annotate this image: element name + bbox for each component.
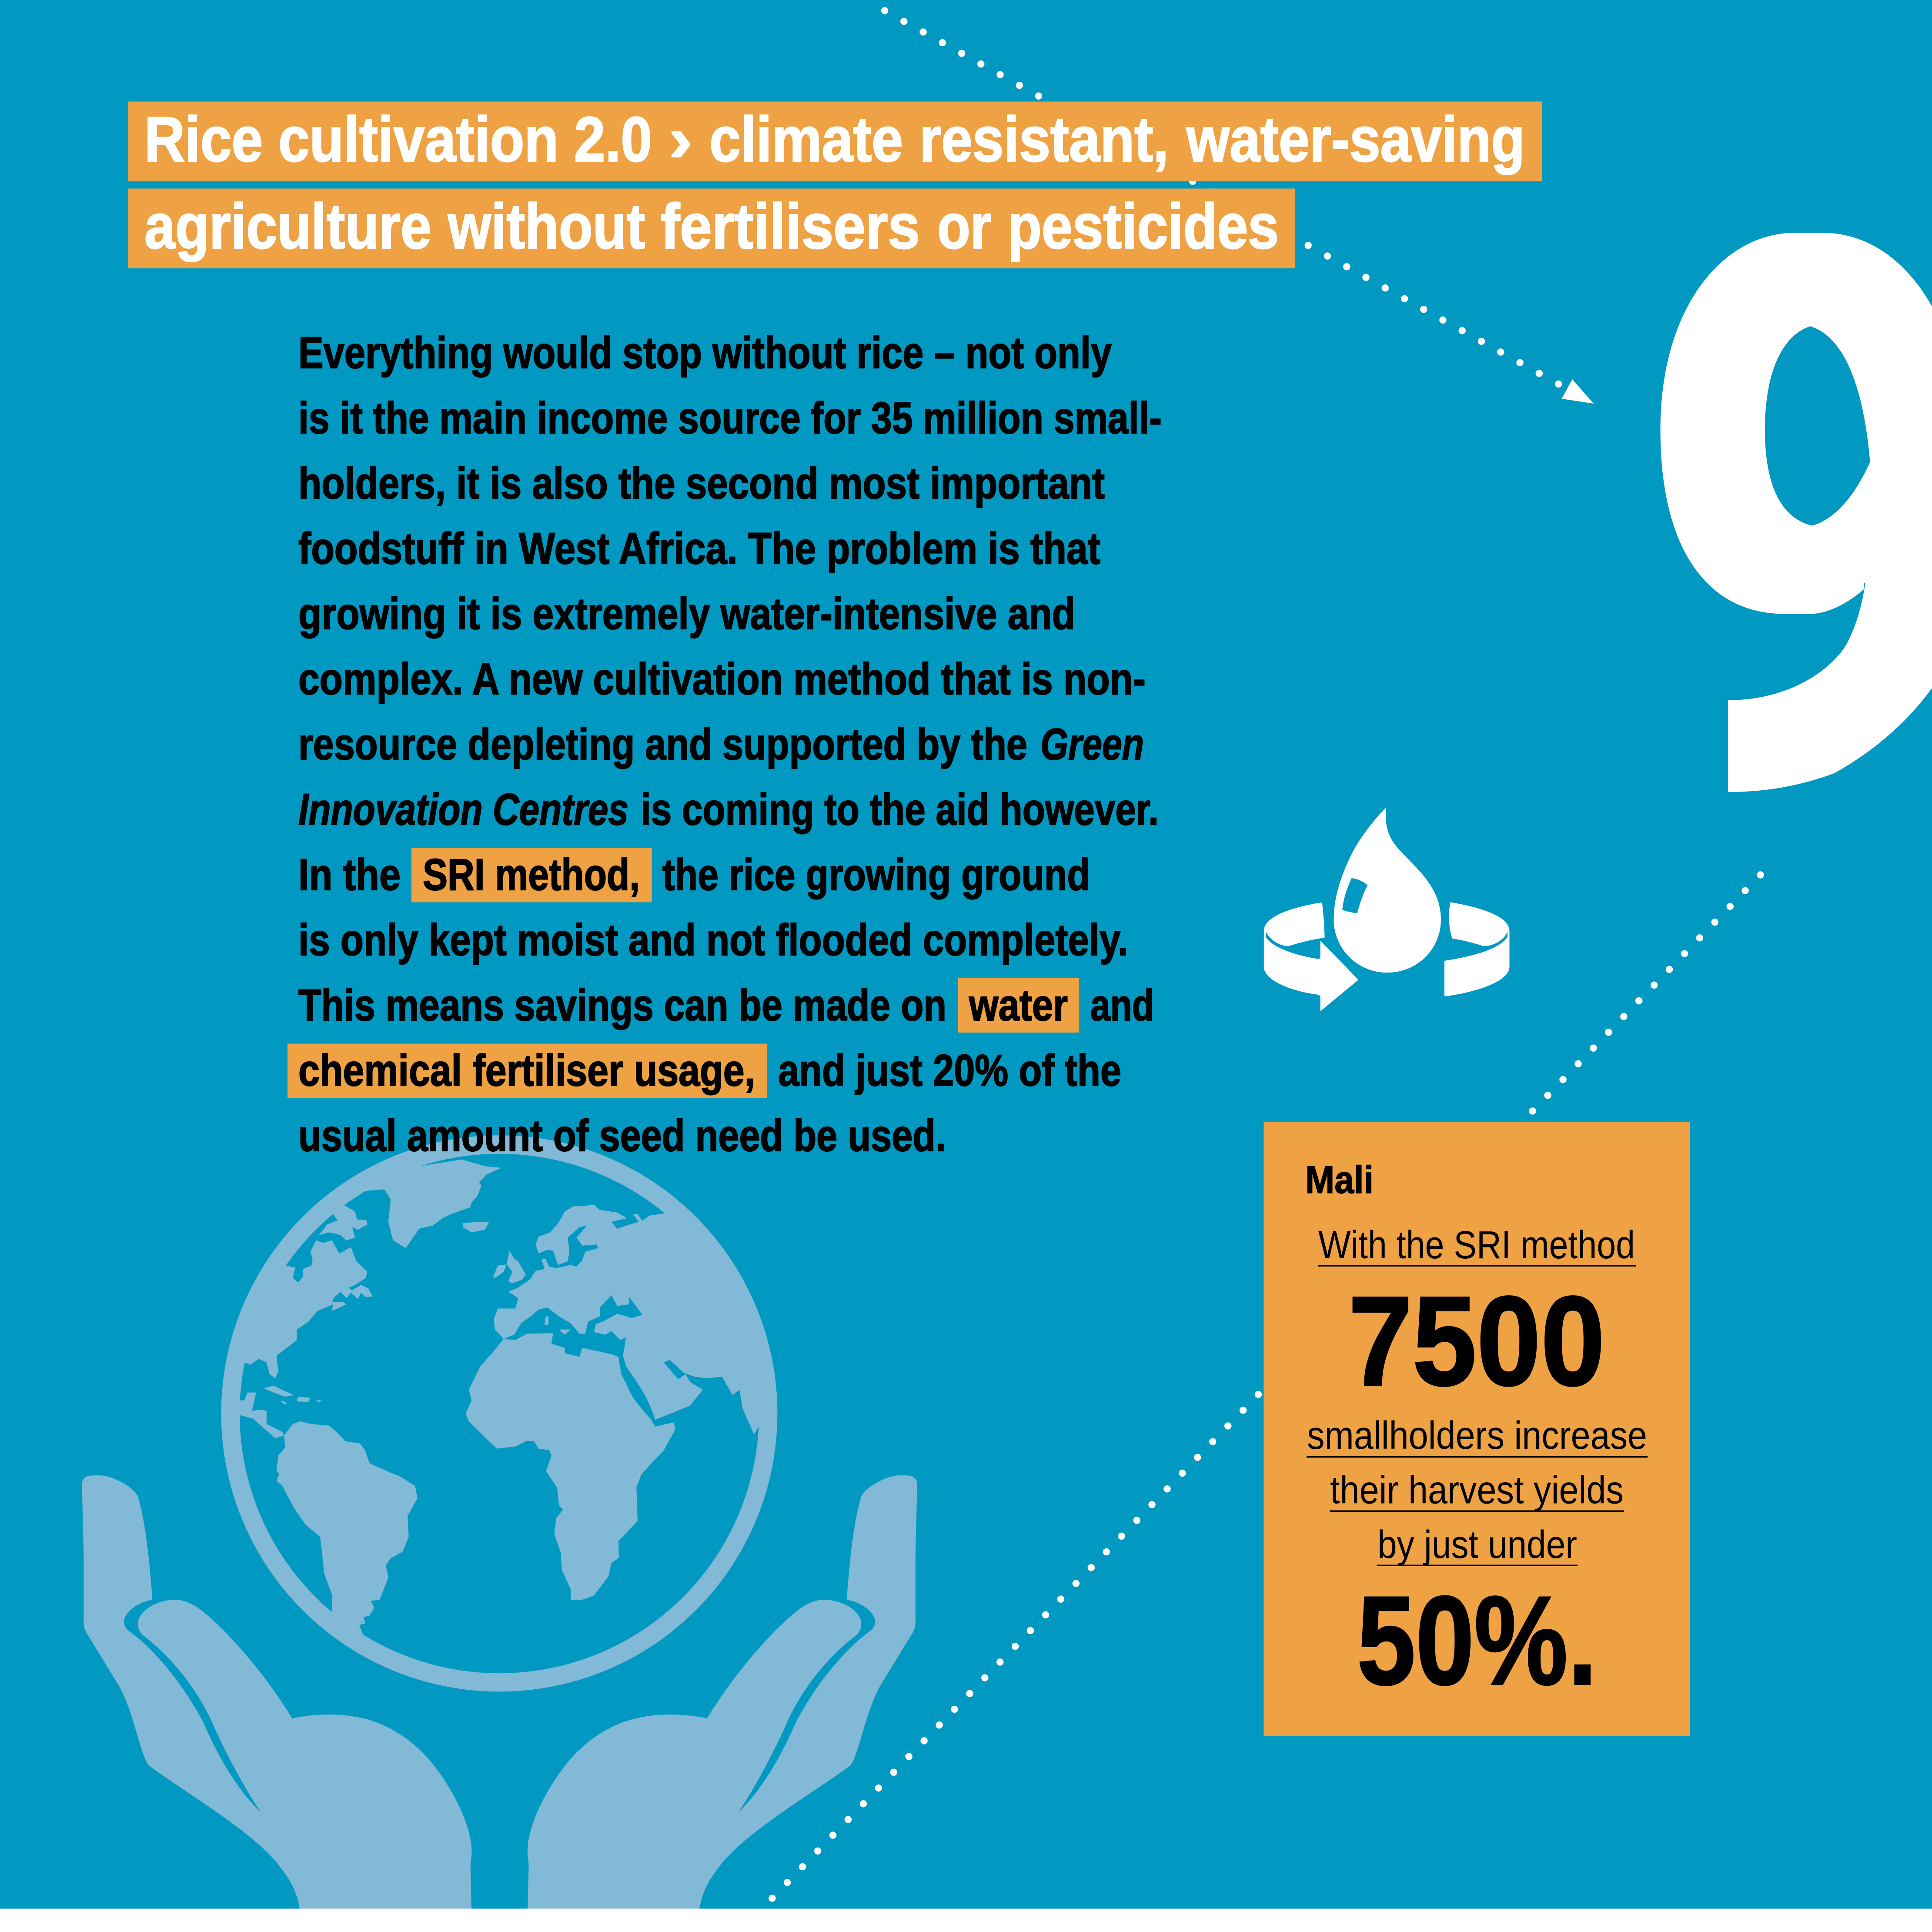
body text block: chemical fertiliser usage, — [298, 1046, 755, 1095]
figure: 50%: 50%. — [1357, 1570, 1597, 1711]
heading text line 2: agriculture — [144, 191, 431, 262]
body text block: Everything would stop without rice – not only — [298, 328, 1112, 378]
left hand — [82, 1475, 471, 1912]
callout line: their harvest yields: their harvest yields — [1330, 1469, 1624, 1512]
callout line: by just under: by just under — [1377, 1523, 1577, 1567]
land: European islands — [463, 1222, 571, 1335]
callout line: With the SRI method: With the SRI method — [1318, 1223, 1635, 1267]
body text block: foodstuff in West Africa. The problem is that — [298, 524, 1100, 573]
body text block: This means savings can be made on — [298, 980, 946, 1030]
body text block: and just 20% of the — [778, 1046, 1121, 1095]
body text block: In the — [298, 850, 401, 899]
body text block: Innovation Centres — [298, 785, 628, 834]
callout line: smallholders increase: smallholders increase — [1307, 1414, 1647, 1457]
body text block: usual amount of seed need be used. — [298, 1111, 946, 1160]
arrow: dotted line from heading to numeral — [885, 10, 1594, 404]
heading text line 1: resistant, — [919, 104, 1169, 175]
body text block: Green — [1040, 719, 1144, 769]
highlight: water — [958, 978, 1079, 1033]
heading bar line 1 — [128, 102, 1542, 181]
heading text line 2 — [144, 191, 1279, 262]
highlight: chemical fertiliser usage — [287, 1044, 767, 1098]
page bottom margin — [0, 1909, 1932, 1932]
illustration: hands holding globe — [82, 1135, 917, 1912]
big numeral 9 — [1661, 233, 1932, 792]
heading text line 1: climate — [709, 104, 903, 175]
body text block: resource depleting and supported by the — [298, 719, 1027, 769]
body text block: growing it is extremely water-intensive and — [298, 589, 1075, 638]
land: Central America — [233, 1393, 284, 1438]
land: Africa — [466, 1333, 675, 1600]
callout title: Mali — [1305, 1158, 1374, 1201]
land: Greenland — [338, 1157, 501, 1248]
heading text line 1 — [144, 104, 1525, 175]
callout: Mali box — [1263, 1122, 1690, 1736]
heading — [128, 102, 1542, 268]
heading text line 2: pesticides — [1008, 191, 1279, 262]
heading text line 2: fertilisers — [661, 191, 920, 262]
icon: water drop with circular arrow — [1264, 808, 1509, 1011]
body text block: SRI method, — [423, 850, 640, 899]
dotted line: top right to Mali box — [1533, 874, 1762, 1111]
body text block: water — [969, 980, 1068, 1030]
highlight: SRI method — [411, 848, 652, 902]
heading text line 1: water-saving — [1186, 104, 1525, 175]
heading bar line 2 — [128, 189, 1295, 268]
land: Eurasia — [494, 1205, 767, 1434]
body text block — [287, 328, 1162, 1160]
globe ring — [221, 1135, 777, 1691]
body text block: is it the main income source for 35 million small- — [298, 393, 1162, 443]
figure: 7500: 7500 — [1348, 1270, 1605, 1412]
heading text line 2: without — [448, 191, 645, 262]
dotted line: bottom to Mali box — [772, 1393, 1260, 1898]
right hand — [528, 1475, 917, 1912]
body text block: the rice growing ground — [662, 850, 1090, 899]
heading text line 2: or — [937, 191, 991, 262]
heading text line 1: Rice cultivation 2.0 — [144, 104, 652, 175]
body text block: is coming to the aid however. — [641, 785, 1159, 834]
land: North America — [241, 1240, 373, 1378]
body text block: complex. A new cultivation method that is non- — [298, 654, 1146, 704]
land: Arctic Canada — [319, 1203, 368, 1240]
body text block: and — [1090, 980, 1154, 1030]
heading text line 1: › — [669, 104, 692, 175]
body text block: holders, it is also the second most important — [298, 458, 1105, 508]
land: South America — [277, 1421, 418, 1639]
body text block: is only kept moist and not flooded completely. — [298, 915, 1128, 965]
land: Caribbean islands — [264, 1386, 322, 1404]
